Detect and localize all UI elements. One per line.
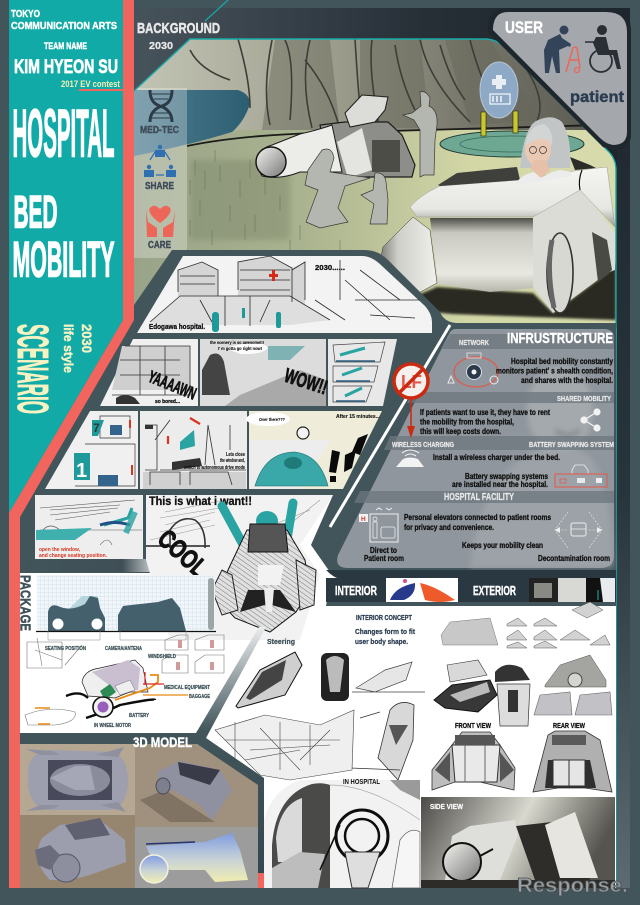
heading: interior: INTERIOR: [335, 583, 377, 598]
watermark: Response: Response.: [517, 875, 628, 897]
panel: storyboard row 3: [45, 411, 382, 489]
panel: package: [16, 575, 224, 729]
frame: over there: Over there???: [259, 417, 285, 423]
image: exterior references: [529, 578, 615, 602]
interior concept text: INTERIOR CONCEPT: [356, 613, 412, 622]
panel: left title column: BED: [14, 186, 58, 238]
frame: yawning in room: so bored...: [155, 399, 180, 405]
exterior concept sketches: [434, 602, 612, 726]
team name: KIM HYEON SU: [14, 57, 118, 78]
hologram battery: [480, 62, 518, 118]
section: hospital facility: Direct to: [370, 546, 397, 555]
image: bean bag chairs: [386, 578, 458, 602]
render: rear three-quarter: [20, 815, 135, 888]
frame: elevator: 7: [93, 421, 100, 435]
lake: [134, 90, 250, 156]
frame: reclining sequence: [328, 339, 397, 406]
panel: left title column: [8, 0, 134, 888]
text: HOSPITAL: [12, 96, 114, 172]
section: shared mobility: If patients want to use it, they have to rent: [420, 408, 550, 417]
white strip beside storyboard: [330, 325, 450, 527]
heading: 3D model: 3D MODEL: [133, 734, 192, 750]
team label: TEAM NAME: [44, 41, 87, 51]
panel: left title column: MOBILITY: [12, 232, 114, 288]
package labels: CAMERA/ANTENA: [105, 646, 142, 652]
frame: autonomous mode: the window and,: [220, 458, 245, 464]
icon: care heart and hands: [146, 206, 175, 251]
package labels: IN WHEEL MOTOR: [94, 723, 131, 729]
frame: open window: open the window,: [39, 547, 80, 553]
package labels: MEDICAL EQUIPMENT: [164, 685, 210, 691]
scene teal outline: [134, 39, 616, 888]
icon: elder with walker: [544, 26, 580, 73]
package labels: SEATING POSITION: [45, 646, 86, 652]
vertical label: 2030 life style: 2030: [79, 324, 95, 353]
coral corner accent: [258, 873, 264, 888]
section: hospital facility: Personal elevators connected to patient rooms: [404, 513, 551, 522]
seating and posture sketches: [25, 635, 224, 725]
front view sketch: FRONT VIEW: [455, 721, 492, 730]
icon: share people: SHARE: [145, 181, 174, 192]
frame: open window: [35, 495, 143, 559]
section: battery swapping system: [452, 440, 614, 489]
rear view sketch: REAR VIEW: [553, 721, 586, 730]
render: top view: [20, 744, 135, 815]
front view sketch: [432, 721, 515, 790]
section: hospital facility: for privacy and convenience.: [404, 523, 494, 532]
panel: interior and exterior header: [326, 570, 616, 602]
teal raised arms: [222, 503, 293, 550]
section bands: [354, 334, 614, 503]
section: wireless charging: Install a wireless charger under the bed.: [433, 453, 560, 462]
frame: this is what I want: [146, 494, 333, 640]
label: steering: Steering: [267, 637, 295, 646]
frame: yawning in room: YAAAAWN: [146, 367, 199, 403]
portrait watermark: [470, 366, 614, 568]
icon: DNA med-tec: MED-TEC: [140, 125, 179, 136]
frame: open window: and change seating position.: [39, 553, 107, 559]
top dark header panel: [134, 0, 630, 888]
people in scene: [305, 92, 437, 228]
heading: user: USER: [505, 18, 543, 37]
section: battery swapping system: are installed near the hospital.: [452, 480, 548, 489]
panel: storyboard row 4: [35, 494, 333, 640]
charging platform: [440, 111, 584, 157]
headline: This is what i want!!: [149, 494, 252, 508]
interior concept text: user body shape.: [355, 637, 408, 646]
panel: interior and exterior sketches: [215, 602, 628, 897]
render: shaded side view: [135, 827, 258, 888]
section: wireless charging: [392, 440, 560, 467]
frame: wow scenery: I' m gotta go right now!: [218, 346, 262, 351]
section: shared mobility: the mobility from the hospital,: [420, 418, 514, 426]
frame: wow scenery: the scenery is so awesome!!!: [210, 340, 264, 345]
heading: exterior: EXTERIOR: [473, 583, 516, 598]
frame: wow scenery: [200, 339, 330, 406]
section: hospital facility: Patient room: [364, 554, 404, 563]
vertical label: 2030 life style: [61, 324, 95, 373]
woman in vehicle: [518, 117, 571, 180]
section: network: and shares with the hospital.: [521, 376, 613, 385]
side view image: [421, 797, 615, 888]
front vehicle: [377, 157, 616, 320]
section: hospital facility: HOSPITAL FACILITY: [444, 492, 514, 503]
package labels: [45, 646, 210, 729]
section: battery swapping system: BATTERY SWAPPING SYSTEM: [529, 440, 614, 449]
label: side view: SIDE VIEW: [430, 802, 464, 811]
panel: 3D model renders: [20, 734, 264, 888]
back vehicle: [256, 95, 415, 178]
sketched vehicle back: [212, 524, 316, 632]
section: network: NETWORK: [459, 338, 489, 347]
panel: user badge: [488, 8, 631, 150]
background scene illustration: [134, 39, 616, 330]
icon: DNA med-tec: [140, 90, 179, 136]
frame: autonomous mode: [140, 411, 247, 489]
contest label: 2017 EV contest: [61, 79, 121, 90]
package labels: BATTERY: [129, 713, 149, 719]
frame: over there: [246, 411, 382, 489]
frame: elevator: 1: [76, 460, 87, 482]
render: perspective view: [135, 744, 258, 827]
caption: 2030: 2030......: [315, 263, 345, 272]
dark fading band under storyboard: [20, 559, 166, 572]
section: shared mobility: SHARED MOBILITY: [557, 394, 611, 403]
grass texture: [190, 150, 340, 250]
section: network: monitors patient' s shealth condition,: [496, 366, 613, 376]
section: wireless charging: WIRELESS CHARGING: [392, 440, 454, 449]
panel: infrastructure: [337, 329, 614, 568]
section: battery swapping system: Battery swapping systems: [465, 472, 548, 481]
vertical heading: package: PACKAGE: [16, 575, 34, 631]
frame: autonomous mode: Lets close: [226, 452, 245, 458]
tree trunks: [262, 40, 471, 130]
icon: care heart and hands: CARE: [148, 240, 171, 251]
package layout cutaway: [66, 660, 188, 718]
label: 2030: 2030: [149, 41, 173, 52]
school name line 2: COMMUNICATION ARTS: [11, 20, 117, 32]
frame: autonomous mode: switch to autonomous drive mode: [184, 465, 245, 471]
frame: over there: After 15 minutes...: [336, 414, 381, 420]
in hospital image: [264, 777, 420, 888]
section: hospital facility: [359, 492, 610, 563]
interior concept text: [355, 613, 415, 646]
white main sketch area: [20, 495, 616, 888]
frame: yawning in room: [100, 339, 199, 406]
icon: wheelchair user: [585, 25, 621, 72]
school name: TOKYO: [11, 8, 40, 20]
dark storyboard and infrastructure backing: [20, 250, 616, 606]
package labels: WINDSHIELD: [148, 654, 176, 660]
section: hospital facility: H: [361, 516, 366, 523]
section: shared mobility: this will keep costs down.: [420, 427, 501, 436]
interior concept text: Changes form to fit: [355, 627, 415, 636]
label: in hospital: IN HOSPITAL: [343, 777, 380, 786]
section: hospital facility: Keeps your mobility clean: [462, 541, 543, 550]
coral rule: [79, 89, 123, 91]
panel: storyboard row 2: [100, 339, 397, 406]
section: network: [448, 338, 613, 387]
caption: Edogawa hospital: Edogawa hospital.: [149, 324, 205, 331]
package labels: BAGGAGE: [189, 694, 210, 700]
shout: COOL: COOL: [152, 523, 214, 583]
icon: no-fee sign and arrow: LF: [401, 372, 422, 392]
panel: storyboard scene 1 hospital: [137, 256, 432, 333]
label: patient: patient: [570, 89, 625, 106]
frame: wow scenery: WOW!!: [281, 365, 330, 399]
vertical label: 2030 life style: life style: [61, 324, 76, 373]
heading: background: BACKGROUND: [137, 21, 220, 37]
icon: no-fee sign and arrow: [394, 364, 428, 438]
dark diagonal divider: [20, 627, 266, 888]
section: shared mobility: [420, 394, 611, 436]
package grid with silhouettes: [36, 575, 216, 640]
section: hospital facility: Decontamination room: [538, 554, 610, 563]
frame: elevator: [45, 411, 138, 489]
panel: left title column: SCENARIO: [8, 324, 57, 414]
rear view sketch: [533, 721, 612, 792]
interior seat sketches: [215, 652, 425, 780]
icon: share people: [144, 145, 176, 192]
section: network: Hospital bed mobility constantly: [511, 357, 613, 366]
